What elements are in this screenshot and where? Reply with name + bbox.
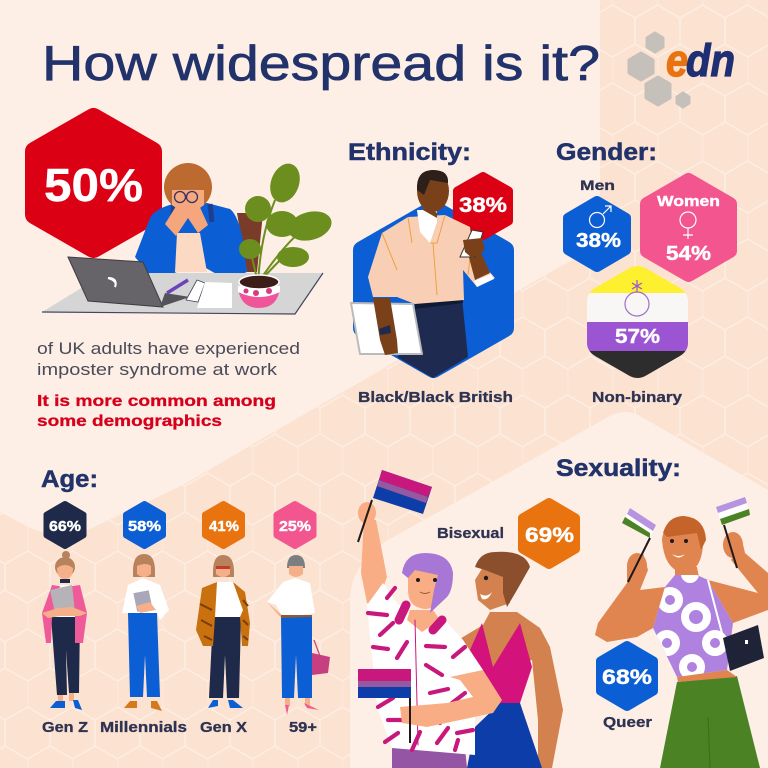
women hexagon: 54% (666, 243, 711, 265)
women hexagon (647, 180, 730, 275)
value 38%: 38% (459, 194, 507, 217)
panel: ethnicity (348, 139, 513, 406)
logo: edn (629, 33, 735, 107)
panel: sexuality (358, 455, 768, 768)
label: 59+: 59+ (289, 719, 317, 736)
59+ badge: 25% (279, 519, 311, 535)
logo: edn: dn (686, 35, 735, 86)
heading: ethnicity: Ethnicity: (348, 139, 471, 166)
Millennials badge: 58% (128, 519, 161, 535)
Gen X badge: 41% (209, 519, 239, 535)
callout line 2: some demographics (37, 413, 222, 430)
callout: It is more common among (37, 393, 276, 410)
red hexagon (458, 176, 508, 236)
illustration: woman in pink top (458, 552, 563, 768)
Millennials badge (126, 504, 163, 546)
logo: edn: e (666, 35, 688, 86)
Gen X badge (205, 504, 242, 546)
men hexagon: 38% (576, 230, 621, 252)
stat value: 50% (44, 159, 143, 211)
heading: gender: Gender: (556, 139, 657, 166)
bisexual hexagon (522, 502, 576, 564)
illustration: person with genderqueer flags (595, 497, 768, 768)
illustration: person with bisexual flags (358, 470, 502, 768)
Gen Z badge: 66% (49, 519, 81, 535)
stat hexagon 50% (35, 118, 152, 248)
panel: gender (556, 139, 730, 406)
panel: headline stat (35, 118, 335, 430)
blue hexagon (362, 209, 505, 369)
label: Millennials: Millennials (100, 719, 187, 736)
59+ badge (276, 504, 314, 546)
label: Gen Z: Gen Z (42, 719, 88, 736)
title: How widespread is it? (42, 37, 600, 91)
description line 2: imposter syndrome at work (37, 361, 278, 379)
description: of UK adults have experienced (37, 340, 300, 358)
non-binary hexagon (585, 262, 690, 381)
figure: 59+ (267, 555, 330, 715)
figure: Gen Z (42, 551, 87, 710)
Gen Z badge (46, 504, 84, 546)
men hexagon (568, 201, 626, 267)
figure: Gen X (196, 555, 250, 708)
label: Gen X: Gen X (200, 719, 247, 736)
label: bisexual: Bisexual (437, 525, 504, 542)
panel: age (41, 466, 330, 736)
illustration: man with phone (351, 170, 495, 378)
label: men: Men (580, 177, 615, 193)
label: Black/Black British: Black/Black British (358, 389, 513, 406)
label: queer: Queer (603, 714, 652, 731)
illustration: worried worker at desk (42, 159, 335, 314)
value 68%: 68% (602, 666, 652, 689)
women hexagon: Women (657, 193, 720, 210)
queer hexagon (600, 646, 654, 706)
heading: sexuality: Sexuality: (556, 455, 681, 482)
non-binary hexagon: 57% (615, 326, 660, 348)
heading: age: Age: (41, 466, 98, 493)
label: non-binary: Non-binary (592, 389, 683, 406)
figure: Millennial (122, 554, 169, 711)
value 69%: 69% (525, 524, 574, 547)
